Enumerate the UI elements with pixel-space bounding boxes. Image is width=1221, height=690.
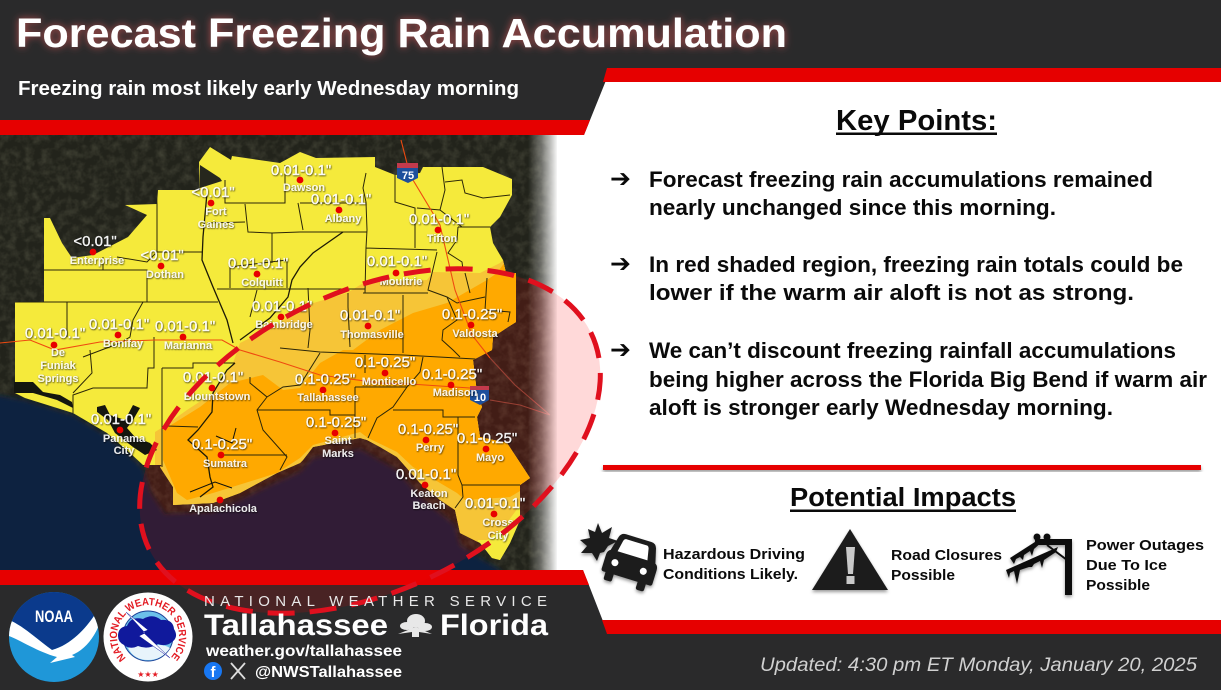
heading: potential impacts: Potential Impacts [790,484,1016,512]
map: city names [38,182,514,542]
map: accumulation values: 0.01-0.1" [183,369,243,386]
icon: X [231,663,245,679]
panel: white key points [557,82,1221,622]
map: accumulation values: 0.01-0.1" [91,411,151,428]
key point 3: aloft is stronger early Wednesday morning. [649,395,1113,420]
map: roads [0,140,550,415]
footer: right red band [602,620,1221,634]
map: city names: Bainbridge [255,319,313,331]
map: city names: Valdosta [452,328,498,340]
icon: oak tree [398,614,432,637]
icon: icy power line [1006,534,1072,595]
map: city names: De [51,347,65,359]
map: city names: Saint [325,435,352,447]
icon: interstate 75 shield [397,163,418,183]
map: accumulation values: <0.01" [191,184,235,201]
icon: NWS logo: NATIONAL WEATHER SERVICE [110,598,186,662]
icon: NOAA logo [9,592,99,682]
map: city names: Enterprise [70,255,124,267]
map: city names: Tallahassee [297,392,359,404]
map: accumulation values: 0.1-0.25" [422,366,482,383]
header: right red band [603,68,1221,82]
map: city names: Marianna [164,340,213,352]
icon: interstate 10 shield: 10 [474,392,486,404]
footer: office name: NATIONAL WEATHER SERVICE [204,593,547,610]
key point 2: lower if the warm air aloft is not as strong. [649,280,1134,305]
footer: office name: Florida [440,609,548,642]
map: accumulation values: 0.01-0.1" [25,325,85,342]
dashed outlook ellipse [83,199,657,683]
text: power outages: Power Outages [1086,537,1204,554]
outlook tint: outside map [180,284,600,613]
map: city names: Cross [482,517,514,529]
footer: social handle: @NWSTallahassee [255,664,402,681]
icon: NWS logo: ★★★ [137,670,159,679]
footer: left red band [0,570,589,585]
map: city names: Gaines [198,219,234,231]
map: city names: City [114,445,135,457]
key point 2: ➔ [610,249,631,278]
icon: interstate 75 shield: 75 [402,170,414,182]
key point 1: Forecast freezing rain accumulations remained [649,167,1153,192]
map: coast light strip [280,462,316,476]
map: city names: Albany [325,213,362,225]
map: accumulation values: <0.01" [140,247,184,264]
map: accumulation values: 0.01-0.1" [465,495,525,512]
icon: car crash [580,523,664,594]
subtitle: Freezing rain most likely early Wednesday morning [18,77,519,100]
map: accumulation values: 0.01-0.1" [311,191,371,208]
text: hazardous driving: Conditions Likely. [663,566,798,583]
map: accumulation values: 0.01-0.1" [367,253,427,270]
key point 1: nearly unchanged since this morning. [649,195,1056,220]
map panel [0,135,557,570]
map: accumulation values: 0.01-0.1" [396,466,456,483]
map: city names: Thomasville [340,329,404,341]
map: city names: Fort [205,206,227,218]
map: city names: Funiak [40,360,77,372]
map: accumulation values: 0.01-0.1" [340,307,400,324]
text: power outages [1086,537,1204,594]
map: accumulation values: 0.01-0.1" [228,255,288,272]
map: city names: Dawson [283,182,325,194]
map: accumulation values: 0.1-0.25" [442,306,502,323]
text: hazardous driving [663,546,805,583]
map: accumulation values: 0.1-0.25" [355,354,415,371]
footer: updated time: Updated: 4:30 pm ET Monday, January 20, 2025 [760,655,1197,676]
map: accumulation values: 0.01-0.1" [155,318,215,335]
map: city names: Mayo [476,452,504,464]
map: dark orange area [163,262,530,500]
red divider [603,465,1201,470]
key point 3: ➔ [610,335,631,364]
map: accumulation values: 0.01-0.1" [409,211,469,228]
key point 3: We can’t discount freezing rainfall accumulations [649,338,1176,363]
icon: facebook: f [210,664,216,681]
key point 1 [610,164,1153,220]
map: city names: Monticello [362,376,416,388]
map: right fade [528,135,558,571]
header: left red band [0,120,590,135]
map: accumulation values: 0.1-0.25" [306,414,366,431]
map: cross city yellow tip [488,523,519,560]
map: accumulation values: 0.1-0.25" [398,421,458,438]
heading: key points: Key Points: [836,105,997,137]
text: power outages: Possible [1086,577,1150,594]
map: city names: Beach [412,500,446,512]
map: city names: Apalachicola [189,503,258,515]
map: county lines [15,165,520,508]
map: city names: Sumatra [203,458,248,470]
footer: office name [204,593,548,642]
key point 3 [610,335,1207,420]
footer: office name: Tallahassee [204,609,388,642]
map: city names: Perry [416,442,445,454]
map: rivers [188,193,343,497]
map: outlook tint [140,276,531,570]
map: accumulation values: 0.01-0.1" [252,298,312,315]
map: city names: Panama [103,433,146,445]
map: city names: Tifton [427,233,457,245]
map: accumulation values: 0.1-0.25" [192,436,252,453]
footer: dark band [0,570,1221,690]
text: road closures [891,547,1002,584]
header: dark band [0,0,1221,135]
map: accumulation values: 0.1-0.25" [295,371,355,388]
map: notch and bays [14,165,236,492]
map: city names: Bonifay [103,338,144,350]
map: city names: City [488,530,509,542]
map: accumulation values: 0.1-0.25" [457,430,517,447]
key point 3: being higher across the Florida Big Bend if warm air [649,367,1207,392]
text: hazardous driving: Hazardous Driving [663,546,805,563]
text: road closures: Road Closures [891,547,1002,564]
map: city names: Blountstown [184,391,251,403]
map: dark land [0,135,560,571]
icon: NWS logo [104,592,192,682]
map: light orange area [155,255,530,570]
map: city dots [51,177,497,517]
text: road closures: Possible [891,567,955,584]
icon: warning triangle [812,529,888,590]
key point 2 [610,249,1183,305]
icon: interstate 10 shield [470,386,489,405]
map: city names: Moultrie [380,276,422,288]
title: Forecast Freezing Rain Accumulation [16,10,787,56]
map: city names: Colquitt [241,277,283,289]
map: city names: Madison [433,387,478,399]
map: city names: Keaton [410,488,448,500]
map: accumulation values: <0.01" [73,233,117,250]
icon: facebook [204,662,222,681]
key point 1: ➔ [610,164,631,193]
map: gulf water [0,394,505,580]
map: city names: Springs [38,373,78,385]
map: accumulation values: 0.01-0.1" [89,316,149,333]
footer: website: weather.gov/tallahassee [205,643,402,660]
map: city names: Dothan [146,269,184,281]
icon: NOAA logo: NOAA [35,607,73,626]
text: power outages: Due To Ice [1086,557,1167,574]
map: city names: Marks [322,448,354,460]
map: accumulation values [25,162,525,512]
map: accumulation values: 0.01-0.1" [271,162,331,179]
map: yellow forecast area [15,147,530,560]
key point 2: In red shaded region, freezing rain totals could be [649,252,1183,277]
